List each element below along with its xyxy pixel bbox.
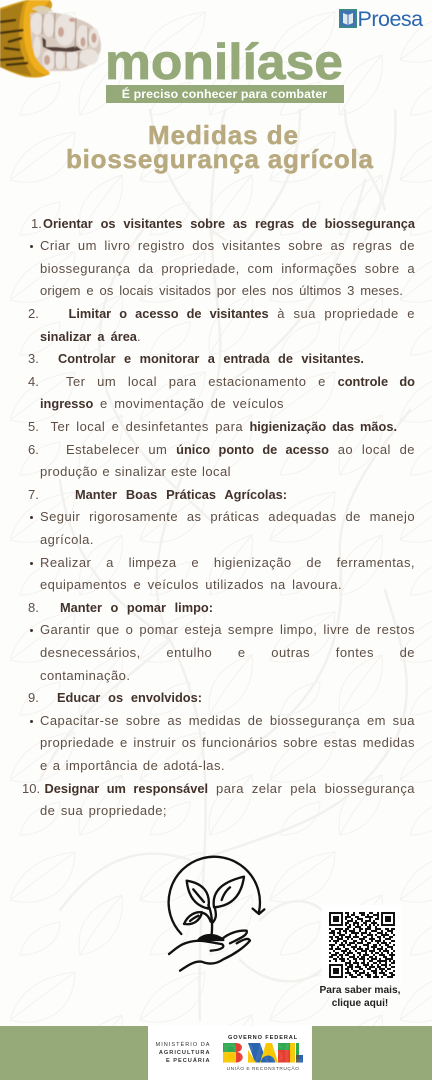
item 8: Garantir que o pomar esteja sempre limpo, livre de restos [40,622,415,637]
heading: Medidas de biossegurança agrícola [66,120,374,174]
item 8: 8. [28,600,39,615]
item 2: Limitar o acesso de visitantes à sua propriedade e [68,306,415,321]
item 1: biossegurança da propriedade, com informações sobre a [40,261,415,276]
logo: Proesa: Proesa [358,7,423,31]
item 4: 4. [28,374,39,389]
heading: Medidas de biossegurança agrícola: biossegurança agrícola [66,144,374,174]
logo: Ministério da Agricultura e Pecuária: MINISTÉRIO DA [156,1042,210,1048]
item 8: contaminação. [40,668,130,683]
QR caption [320,984,400,1008]
QR caption: clique aqui! [332,998,388,1008]
item 1: 1. [31,216,42,231]
item 9: Educar os envolvidos: [57,690,202,705]
item 7: Realizar a limpeza e higienização de ferramentas, [40,555,415,570]
item 6: 6. [28,442,39,457]
item 4: ingresso e movimentação de veículos [40,396,284,411]
item 9: e a importância de adotá-las. [40,758,225,773]
footer logos panel [148,1026,312,1080]
item 3: 3. [28,351,39,366]
heading: Medidas de biossegurança agrícola: Medidas de [148,120,298,150]
item 4: Ter um local para estacionamento e controle do [66,374,415,389]
item 8 [28,600,415,683]
footer band [0,1026,432,1080]
image: cacao pod [0,0,102,78]
item 4 [28,374,415,411]
item 9: Capacitar-se sobre as medidas de biossegurança em sua [40,713,415,728]
QR code [322,905,402,985]
item 10: de sua propriedade; [40,803,167,818]
item 1 [30,216,416,298]
item 9: propriedade e instruir os funcionários sobre estas medidas [40,735,415,750]
logo: Governo Federal Brasil: GOVERNO FEDERAL [228,1035,298,1041]
item 2: 2. [28,306,39,321]
subtitle banner: É preciso conhecer para combater [122,87,327,101]
logo: Ministério da Agricultura e Pecuária: E PECUÁRIA [166,1058,210,1064]
item 8: Manter o pomar limpo: [60,600,213,615]
item 7 [28,487,415,592]
item 3: Controlar e monitorar a entrada de visitantes. [58,351,364,366]
item 9: 9. [28,690,39,705]
item 7: agrícola. [40,532,94,547]
item 1: Criar um livro registro dos visitantes sobre as regras de [40,238,415,253]
item 9 [28,690,415,773]
item 1: Orientar os visitantes sobre as regras de biossegurança [43,216,415,231]
item 10 [22,781,415,818]
item 5: Ter local e desinfetantes para higienização das mãos. [50,419,397,434]
item 7: equipamentos e veículos utilizados na lavoura. [40,577,342,592]
item 10: 10. [22,781,40,796]
icon: hand holding seedling [167,856,266,972]
item 6 [28,442,415,479]
item 5: 5. [28,419,39,434]
QR caption: Para saber mais, [320,984,400,996]
item 6: Estabelecer um único ponto de acesso ao local de [66,442,415,457]
item 7: 7. [28,487,39,502]
logo: Governo Federal Brasil: UNIÃO E RECONSTRUÇÃO [227,1065,299,1072]
subtitle banner [106,85,344,103]
item 2 [28,306,415,344]
item 6: produção e sinalizar este local [40,464,231,479]
logo: Ministério da Agricultura e Pecuária [156,1041,210,1064]
item 8: desnecessários, entulho e outras fontes de [40,645,415,660]
item 7: Seguir rigorosamente as práticas adequadas de manejo [40,509,415,524]
item 2: sinalizar a área. [40,329,141,344]
item 1: origem e os locais visitados por eles nos últimos 3 meses. [40,283,403,298]
item 7: Manter Boas Práticas Agrícolas: [75,487,287,502]
item 10: Designar um responsável para zelar pela biossegurança [44,781,415,796]
logo: Ministério da Agricultura e Pecuária: AGRICULTURA [159,1050,210,1056]
